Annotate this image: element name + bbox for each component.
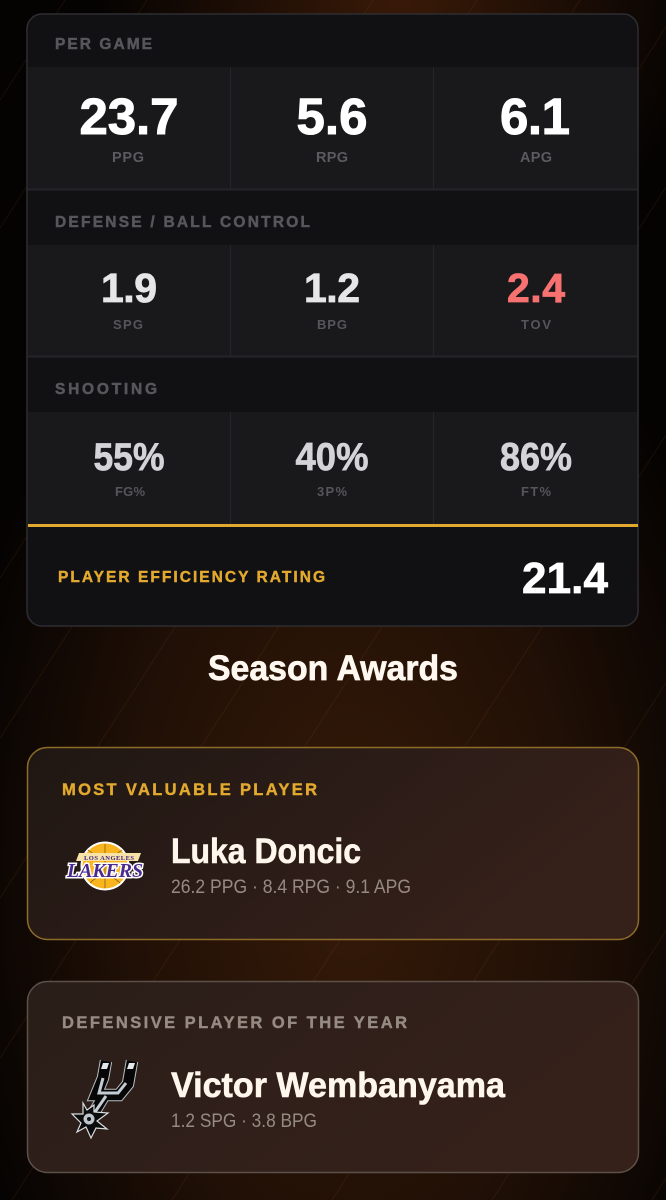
- stat: TOV: [507, 265, 565, 332]
- heading: season awards: Season Awards: [208, 649, 458, 688]
- stat: TOV: 2.4: [507, 265, 565, 311]
- stat: APG: APG: [520, 150, 552, 166]
- stat: 3P%: [296, 436, 368, 499]
- stat: RPG: RPG: [316, 150, 348, 166]
- stat: SPG: [101, 265, 157, 332]
- player name: Victor Wembanyama: [171, 1066, 506, 1105]
- stat: PPG: PPG: [112, 150, 144, 166]
- PER value: 21.4: [522, 554, 609, 603]
- icon: spurs logo: [72, 1061, 135, 1138]
- section heading: per game: PER GAME: [55, 36, 152, 53]
- section heading: shooting: SHOOTING: [55, 381, 157, 398]
- stat: APG: 6.1: [500, 88, 570, 145]
- player name: Luka Doncic: [171, 832, 361, 871]
- PER label: PLAYER EFFICIENCY RATING: [58, 569, 325, 586]
- stat: FT%: [500, 436, 572, 499]
- stat: FG%: FG%: [115, 484, 145, 499]
- stat: SPG: 1.9: [101, 265, 157, 311]
- panel: defensive player of the year: [28, 982, 638, 1172]
- stat: SPG: SPG: [113, 317, 143, 332]
- icon: lakers logo: [66, 842, 143, 890]
- stat: 3P%: 3P%: [317, 484, 347, 499]
- stat: BPG: [304, 265, 360, 332]
- panel: most valuable player: [28, 748, 638, 940]
- stat: FT%: 86%: [500, 436, 572, 479]
- player stats: 1.2 SPG · 3.8 BPG: [171, 1111, 317, 1132]
- panel: season stats: [27, 14, 638, 626]
- award label: DEFENSIVE PLAYER OF THE YEAR: [62, 1014, 407, 1032]
- stat: BPG: 1.2: [304, 265, 360, 311]
- stat: PPG: 23.7: [80, 88, 178, 145]
- stat: FG%: 55%: [94, 436, 164, 479]
- section heading: defense: DEFENSE / BALL CONTROL: [55, 214, 310, 231]
- stat: BPG: BPG: [317, 317, 347, 332]
- stat: 3P%: 40%: [296, 436, 368, 479]
- award label: MOST VALUABLE PLAYER: [62, 781, 317, 799]
- stat: FG%: [94, 436, 164, 499]
- stat: TOV: TOV: [521, 317, 551, 332]
- gold divider: [28, 524, 638, 527]
- stat: FT%: FT%: [521, 484, 551, 499]
- icon: lakers logo: LAKERS: [66, 860, 143, 882]
- stat: RPG: 5.6: [296, 88, 368, 145]
- player stats: 26.2 PPG · 8.4 RPG · 9.1 APG: [171, 877, 411, 898]
- icon: lakers logo: LOS ANGELES: [84, 855, 134, 862]
